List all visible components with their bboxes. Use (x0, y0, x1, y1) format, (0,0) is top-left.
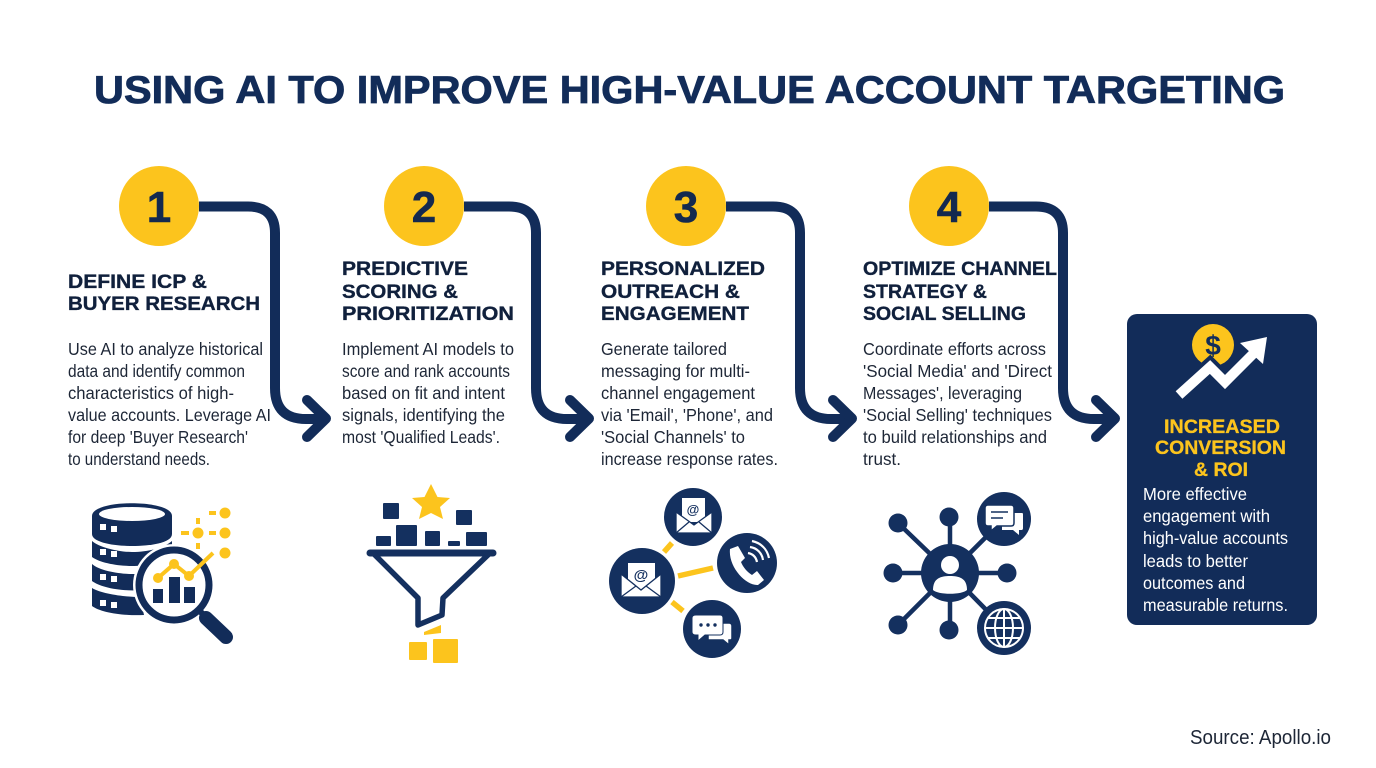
step 3 description: increase response rates. (601, 449, 778, 469)
step 4 heading: SOCIAL SELLING (863, 304, 1026, 325)
step 3 description: Generate tailored (601, 339, 727, 359)
step 3 heading: ENGAGEMENT (601, 304, 749, 325)
step 1 heading: BUYER RESEARCH (68, 294, 260, 315)
icon: dollar coin with rising arrow: $ (1205, 330, 1221, 361)
email envelope left (621, 563, 661, 597)
step 1 heading: DEFINE ICP & (68, 272, 207, 293)
step 2 heading: PREDICTIVE (342, 259, 468, 280)
step 1 heading (68, 272, 260, 315)
step 2 number badge: 2 (412, 183, 436, 232)
step 4 description: Coordinate efforts across (863, 339, 1046, 359)
result description: high-value accounts (1143, 528, 1288, 548)
arrow: step 4 to result (989, 206, 1115, 437)
phone handset (730, 541, 769, 585)
step 1 description: for deep 'Buyer Research' (68, 427, 248, 447)
result heading (1155, 417, 1286, 481)
step 4 heading: OPTIMIZE CHANNEL (863, 259, 1057, 280)
result heading: & ROI (1194, 460, 1248, 481)
email envelope top: @ (687, 502, 699, 517)
step 2 description: most 'Qualified Leads'. (342, 427, 500, 447)
icon: social network hub (884, 492, 1031, 655)
step 4 description (863, 339, 1052, 469)
step 2 description: Implement AI models to (342, 339, 514, 359)
result description: measurable returns. (1143, 595, 1288, 615)
step 4 description: Messages', leveraging (863, 383, 1022, 403)
arrow: step 2 to step 3 (464, 206, 589, 437)
result heading: CONVERSION (1155, 438, 1286, 459)
step 3 description: 'Social Channels' to (601, 427, 745, 447)
step 1 description: Use AI to analyze historical (68, 339, 263, 359)
step 1 description: characteristics of high- (68, 383, 234, 403)
result description: More effective (1143, 484, 1247, 504)
step 4 description: trust. (863, 449, 901, 469)
result description (1143, 484, 1288, 615)
step 4 description: 'Social Media' and 'Direct (863, 361, 1052, 381)
step 2 heading (342, 259, 514, 325)
result description: engagement with (1143, 506, 1270, 526)
chat bubbles (985, 505, 1023, 535)
step 3 description: via 'Email', 'Phone', and (601, 405, 773, 425)
chat bubbles (692, 615, 732, 645)
step 3 heading: OUTREACH & (601, 282, 740, 303)
step 2 number badge (384, 166, 464, 246)
step 1 description: value accounts. Leverage AI (68, 405, 271, 425)
step 4 number badge: 4 (937, 183, 962, 232)
step 4 heading: STRATEGY & (863, 282, 987, 303)
step 1 description (68, 339, 271, 469)
step 3 number badge (646, 166, 726, 246)
email envelope left: @ (634, 567, 648, 584)
step 2 description: signals, identifying the (342, 405, 505, 425)
title: USING AI TO IMPROVE HIGH-VALUE ACCOUNT TARGETING (94, 69, 1285, 112)
result description: leads to better (1143, 551, 1248, 571)
step 3 description: channel engagement (601, 383, 755, 403)
result heading: INCREASED (1164, 417, 1280, 438)
step 4 description: to build relationships and (863, 427, 1047, 447)
icon: database with magnifier (92, 503, 230, 637)
step 2 description: score and rank accounts (342, 361, 510, 381)
step 1 description: to understand needs. (68, 449, 210, 469)
icon: outreach channels (609, 488, 777, 658)
step 2 heading: SCORING & (342, 282, 458, 303)
step 1 number badge (119, 166, 199, 246)
step 2 description (342, 339, 514, 447)
step 4 number badge (909, 166, 989, 246)
step 2 description: based on fit and intent (342, 383, 505, 403)
step 3 heading: PERSONALIZED (601, 259, 765, 280)
icon: funnel with star (370, 484, 493, 663)
step 3 description: messaging for multi- (601, 361, 750, 381)
step 3 description (601, 339, 778, 469)
step 1 description: data and identify common (68, 361, 245, 381)
person (933, 556, 967, 594)
result description: outcomes and (1143, 573, 1245, 593)
step 2 heading: PRIORITIZATION (342, 304, 514, 325)
step 3 heading (601, 259, 765, 325)
source note: Source: Apollo.io (1190, 727, 1331, 749)
arrow: step 1 to step 2 (199, 206, 326, 437)
step 4 description: 'Social Selling' techniques (863, 405, 1052, 425)
step 3 number badge: 3 (674, 183, 698, 232)
step 1 number badge: 1 (147, 183, 171, 232)
email envelope top (676, 498, 712, 533)
icon: dollar coin with rising arrow (1179, 324, 1267, 395)
panel: result card (1127, 314, 1317, 625)
globe (985, 609, 1023, 647)
arrow: step 3 to step 4 (726, 206, 852, 437)
step 4 heading (863, 259, 1057, 325)
